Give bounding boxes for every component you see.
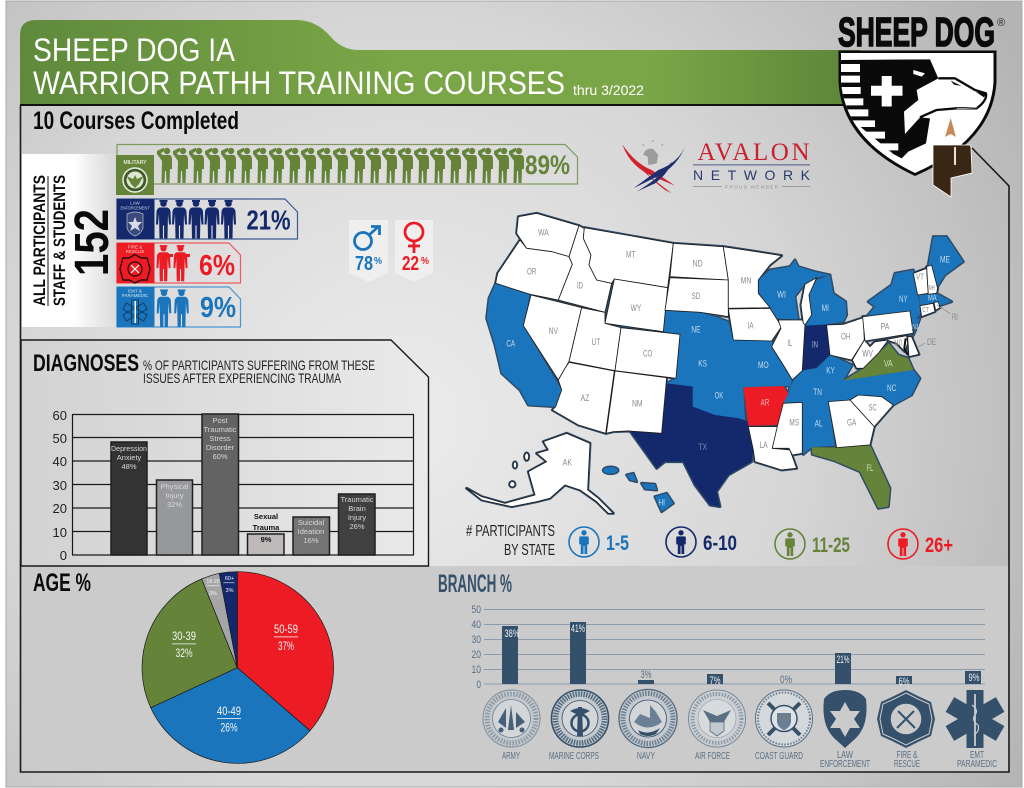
bar chart: branch: 20 (472, 649, 481, 661)
icon: law enforcement badge (823, 690, 867, 748)
bar chart: branch: 7% (710, 675, 721, 687)
legend item: 1-5 (569, 527, 629, 557)
map: participants by state: PA (881, 321, 890, 331)
row: emt and paramedic (116, 287, 240, 327)
pie chart: age: 60+ (225, 576, 234, 582)
bar chart: diagnoses: Injury (348, 513, 366, 522)
bar chart: diagnoses: Depression (111, 444, 147, 453)
map: participants by state: GA (847, 418, 857, 428)
bar chart: branch: 38% (504, 628, 520, 640)
icon: emt star of life (946, 690, 1004, 748)
branch labels: ENFORCEMENT (820, 759, 870, 770)
branch labels: COAST GUARD (755, 751, 803, 762)
map: participants by state: DE (927, 337, 936, 347)
gender tag: female: % (421, 256, 429, 267)
bar chart: diagnoses: 16% (303, 536, 319, 545)
map: participants by state: LA (760, 440, 768, 450)
bar chart: diagnoses: Stress (209, 434, 231, 443)
map: participants by state: HI (658, 498, 665, 508)
gender tag: male (349, 220, 388, 282)
map: participants by state: IN (812, 339, 818, 349)
row: military (116, 144, 578, 195)
gender tag: male: % (374, 256, 382, 267)
pie chart: age: 50-59 (274, 622, 298, 636)
bar chart: diagnoses: 30 (53, 478, 67, 493)
bar chart: diagnoses: Injury (165, 491, 184, 500)
branch labels: ARMY (502, 751, 520, 762)
row: emt and paramedic: PARAMEDIC (122, 293, 149, 298)
map: participants by state: TN (813, 387, 822, 397)
legend item: 6-10: 6-10 (703, 532, 737, 555)
bar chart: diagnoses: 20 (53, 501, 67, 516)
bar chart: diagnoses (53, 408, 414, 563)
map: participants by state: MS (789, 418, 799, 428)
bar chart: diagnoses: Suicidal (298, 518, 324, 527)
row: emt and paramedic: 9% (200, 292, 236, 324)
gender tag: male: 78 (355, 253, 373, 275)
map: participants by state: SC (869, 402, 877, 412)
branch labels: MARINE CORPS (549, 751, 599, 762)
branch labels: FIRE & (896, 750, 918, 761)
pie chart: age: 18-29 (206, 579, 220, 585)
title banner (20, 20, 860, 106)
row: law enforcement: 21% (246, 204, 291, 236)
pie chart: age: 40-49 (217, 704, 241, 718)
bar chart: diagnoses: 0 (60, 548, 67, 563)
map: participants by state: MO (758, 360, 769, 370)
panel: age background (21, 566, 428, 772)
map: participants by state: NH (929, 283, 935, 292)
heading: age: AGE % (33, 569, 91, 597)
map: participants by state: NV (549, 326, 559, 336)
panel: all participants (22, 154, 119, 327)
bar chart: diagnoses: 48% (121, 462, 137, 471)
heading: branch: BRANCH % (438, 570, 512, 598)
bar chart: branch: 21% (836, 654, 850, 666)
bar chart: diagnoses: 40 (53, 454, 67, 469)
map: participants by state: TX (698, 442, 708, 452)
bar chart: branch: 0% (780, 674, 792, 686)
bar chart: diagnoses: 32% (167, 500, 182, 509)
subheading: ISSUES AFTER EXPERIENCING TRAUMA (143, 370, 341, 386)
map: participants by state: OH (841, 331, 850, 341)
map: participants by state: WV (862, 348, 874, 358)
branch labels (502, 750, 997, 770)
bar chart: diagnoses: Trauma (253, 523, 280, 532)
bar chart: diagnoses: Post (212, 416, 228, 425)
pie chart: age: 3% (209, 591, 217, 597)
bar chart: branch: 30 (472, 634, 481, 646)
panel: all participants: 152 (66, 209, 119, 276)
legend: participants by state: BY STATE (504, 542, 555, 559)
map: participants by state: NM (632, 399, 643, 409)
bar chart: diagnoses: 10 (53, 525, 67, 540)
map: participants by state: KY (826, 365, 835, 375)
bar chart: diagnoses: Anxiety (117, 453, 142, 462)
row: fire and rescue (116, 243, 240, 283)
pie chart: age: 26% (220, 720, 238, 734)
map: participants by state (467, 213, 963, 513)
logo: sheep dog: ® (997, 17, 1005, 29)
logo: avalon network: AVALON (698, 139, 810, 166)
legend item: 11-25 (775, 529, 850, 559)
branch labels: EMT (970, 750, 984, 761)
title: WARRIOR PATHH TRAINING COURSES (33, 65, 565, 101)
branch labels: NAVY (637, 751, 655, 762)
map: participants by state: KS (698, 359, 707, 369)
bar chart: diagnoses: Brain (348, 504, 366, 513)
map: participants by state: MA (928, 294, 937, 303)
icon: P mark (933, 145, 972, 197)
title: thru 3/2022 (573, 82, 644, 98)
map: participants by state: OK (715, 390, 724, 400)
subheading: % OF PARTICIPANTS SUFFERING FROM THESE (143, 357, 375, 373)
bar chart: branch: 0 (476, 679, 481, 691)
bar chart: diagnoses: 60% (212, 452, 228, 461)
bar chart: branch: 50 (472, 604, 481, 616)
map: participants by state: NJ (912, 322, 919, 331)
title (33, 32, 644, 101)
legend item: 26+ (888, 529, 953, 559)
bar chart: branch: 3% (640, 669, 652, 681)
icon: arrow (945, 118, 956, 137)
icon: fire and rescue cross (877, 690, 935, 748)
map: participants by state: CA (506, 339, 516, 349)
panel: all participants: STAFF & STUDENTS (50, 175, 69, 306)
map: participants by state: CO (643, 349, 652, 359)
map: participants by state: MD (894, 339, 902, 348)
map: participants by state: AZ (581, 393, 590, 403)
bar chart: diagnoses: Physical (161, 482, 189, 491)
legend item: 11-25: 11-25 (812, 534, 850, 557)
legend item: 1-5: 1-5 (606, 532, 629, 555)
bar chart: branch: 10 (472, 664, 481, 676)
map: participants by state: IA (748, 320, 754, 330)
map: participants by state: CT (922, 305, 929, 314)
logo: sheep dog (837, 9, 1005, 197)
map: participants by state: IL (788, 338, 792, 348)
panel: branch background (428, 566, 1009, 772)
map: participants by state: ME (940, 255, 950, 265)
map: participants by state: UT (592, 337, 601, 347)
row: law enforcement: LAW (130, 200, 141, 206)
icon: air force seal (688, 690, 746, 747)
icon: marine corps seal (552, 690, 608, 747)
map: participants by state: ND (693, 259, 703, 269)
logo: avalon network (622, 139, 811, 193)
bar chart: branch: 41% (571, 623, 585, 635)
map: participants by state: VT (916, 272, 924, 281)
map: participants by state: MN (741, 276, 751, 286)
row: military: 89% (525, 150, 570, 180)
icon: coast guard seal (756, 690, 812, 747)
map: participants by state: AK (563, 458, 573, 468)
title: SHEEP DOG IA (33, 32, 236, 68)
map: participants by state: AL (815, 419, 823, 429)
map: participants by state: FL (867, 463, 873, 473)
row: emt and paramedic: EMT & (128, 288, 142, 294)
pie chart: age: 30-39 (172, 629, 196, 643)
bar chart: branch: 9% (968, 672, 980, 684)
bar chart: branch: 40 (472, 619, 481, 631)
row: fire and rescue: FIRE & (128, 244, 142, 250)
pie chart: age: 37% (278, 639, 294, 653)
bar chart: diagnoses: Traumatic (340, 495, 374, 504)
map: participants by state: WA (538, 228, 549, 238)
map: participants by state: MI (822, 303, 829, 313)
legend item: 6-10 (666, 527, 737, 557)
row: law enforcement (116, 199, 298, 239)
bar chart: diagnoses: 26% (349, 522, 365, 531)
map: participants by state: WY (631, 303, 642, 313)
branch labels: AIR FORCE (695, 751, 730, 762)
icon: navy seal (619, 690, 677, 748)
row: fire and rescue: 6% (199, 250, 235, 282)
map: participants by state: AR (761, 398, 769, 408)
branch labels: PARAMEDIC (957, 759, 997, 770)
pie chart: age (142, 572, 334, 763)
panel: all participants: ALL PARTICIPANTS (30, 175, 49, 306)
row: law enforcement: ENFORCEMENT (120, 206, 150, 210)
map: participants by state: OR (527, 266, 536, 276)
logo: avalon network: PROUD MEMBER (725, 184, 779, 190)
panel: diagnoses (21, 340, 428, 566)
bar chart: diagnoses: 50 (53, 431, 67, 446)
bar chart: diagnoses: Ideation (298, 527, 324, 536)
gender tag: female: 22 (402, 253, 419, 275)
map: participants by state: MT (626, 250, 636, 260)
legend: participants by state: # PARTICIPANTS (466, 523, 555, 540)
map: participants by state: RI (952, 312, 958, 322)
branch labels: LAW (837, 750, 853, 761)
icon: cross (871, 76, 902, 106)
gender tag: female (395, 220, 433, 282)
bar chart: branch (472, 604, 985, 691)
legend: participants by state (466, 523, 953, 559)
heading: diagnoses: DIAGNOSES (33, 350, 139, 377)
bar chart: branch: 6% (898, 676, 910, 688)
map: participants by state: WI (777, 289, 786, 299)
pie chart: age: 32% (176, 646, 193, 660)
bar chart: diagnoses: Disorder (206, 443, 235, 452)
logo: avalon network: NETWORK (693, 167, 811, 183)
map: participants by state: VA (884, 359, 893, 369)
subheading (143, 357, 375, 386)
map: participants by state: SD (692, 291, 700, 301)
map: participants by state: ID (577, 280, 583, 290)
map: participants by state: NE (691, 324, 701, 334)
map: participants by state: NY (899, 294, 908, 304)
bar chart: diagnoses: Traumatic (203, 425, 237, 434)
legend item: 26+: 26+ (925, 534, 953, 557)
row: military: MILITARY (123, 160, 147, 166)
map: participants by state: NC (887, 383, 896, 393)
row: fire and rescue: RESCUE (126, 249, 144, 254)
pie chart: age: 3% (226, 588, 234, 594)
heading: courses completed: 10 Courses Completed (33, 107, 239, 135)
bar chart: diagnoses: Sexual (254, 512, 278, 521)
icon: army seal (483, 690, 540, 747)
bar chart: diagnoses: 60 (53, 408, 67, 423)
bar chart: diagnoses: 9% (261, 535, 272, 544)
branch labels: RESCUE (894, 759, 920, 770)
